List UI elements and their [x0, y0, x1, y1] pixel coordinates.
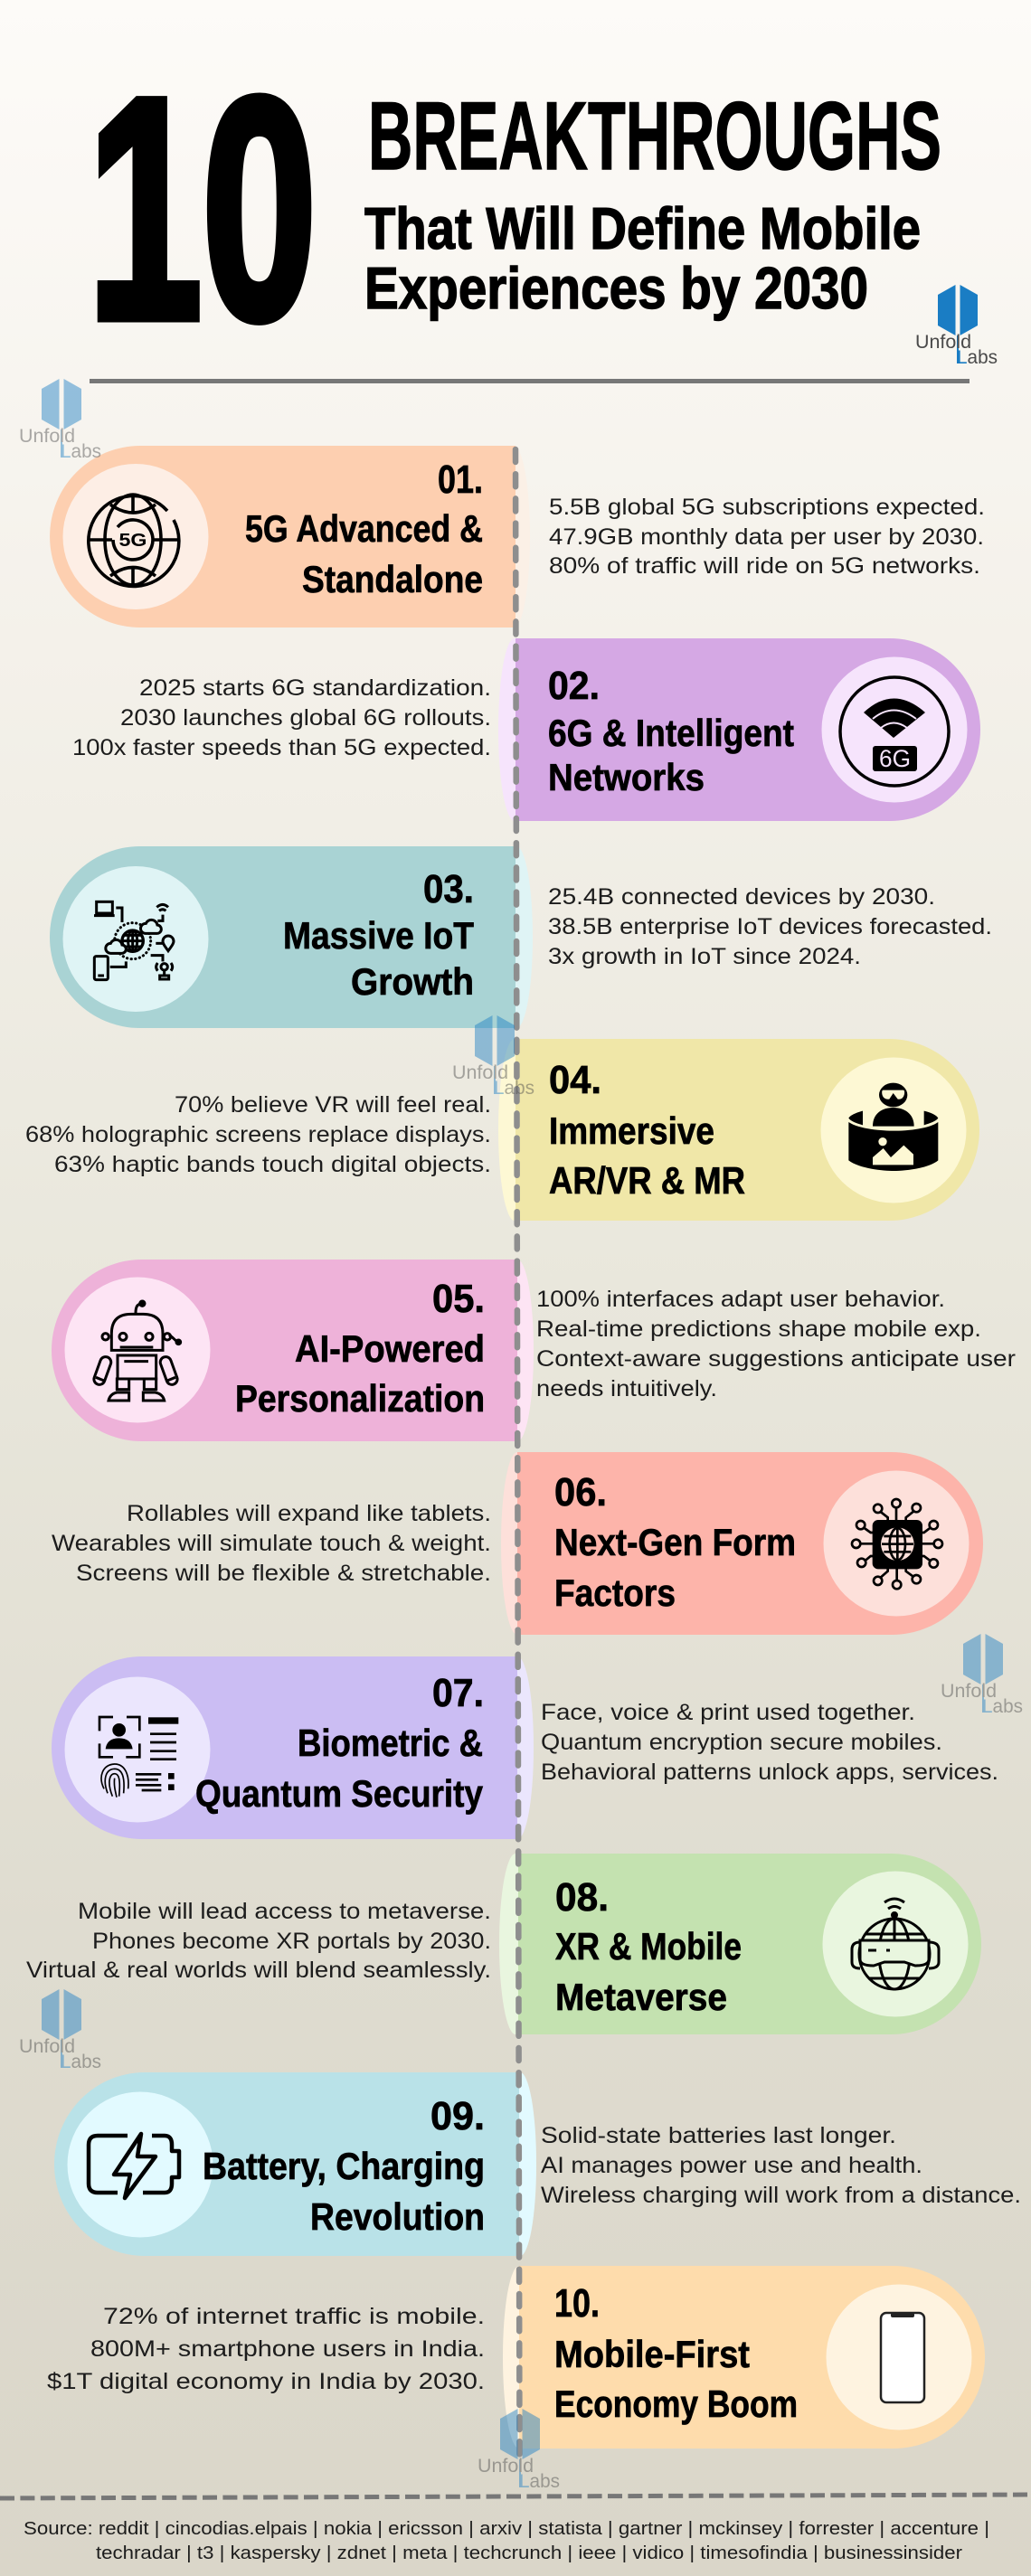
logo: Unfold Labs top right: Unfold: [915, 332, 971, 353]
logo: Unfold Labs top right: [915, 285, 998, 368]
footer dashed divider: [0, 2495, 1031, 2498]
logo: Unfold Labs watermark center: Unfold: [452, 1062, 508, 1083]
title divider: [90, 379, 970, 383]
halo: [498, 1039, 531, 1221]
logo: Unfold Labs watermark bottom: Labs: [519, 2471, 560, 2492]
logo: Unfold Labs watermark right: Labs: [982, 1696, 1023, 1717]
title line 2: Metaverse: [555, 1976, 727, 2018]
icon: IoT network: [94, 901, 174, 980]
stat: Screens will be flexible & stretchable.: [76, 1561, 491, 1586]
pill: [52, 1656, 517, 1839]
stat: Wearables will simulate touch & weight.: [52, 1531, 491, 1556]
icon circle: [63, 866, 208, 1012]
stat: 5.5B global 5G subscriptions expected.: [549, 495, 985, 520]
number: 01.: [438, 458, 483, 502]
panel 01: 5G Advanced & Standalone: [50, 446, 530, 627]
icon: 5G globe: [88, 495, 179, 586]
icon: XR globe helmet: [852, 1899, 939, 1989]
title: [88, 33, 941, 384]
panel 09: Battery, Charging Revolution: [54, 2072, 536, 2256]
icon circle: [65, 1277, 210, 1423]
logo: Unfold Labs watermark right: Unfold: [941, 1681, 997, 1702]
stat: 800M+ smartphone users in India.: [90, 2336, 485, 2362]
title: Biometric &: [298, 1722, 483, 1764]
stats 06: [52, 1501, 491, 1586]
halo: [501, 1260, 534, 1441]
pill: [518, 1854, 981, 2034]
pill: [519, 2266, 985, 2449]
icon circle: [821, 1058, 966, 1203]
stat: Wireless charging will work from a distance.: [541, 2183, 1021, 2208]
panel 02: 6G & Intelligent Networks: [498, 638, 980, 821]
stat: needs intuitively.: [536, 1376, 717, 1401]
stat: 80% of traffic will ride on 5G networks.: [549, 553, 980, 579]
stat: Phones become XR portals by 2030.: [92, 1929, 491, 1954]
title: 5G Advanced &: [245, 507, 483, 550]
stats 01: [549, 495, 985, 579]
stat: 2025 starts 6G standardization.: [139, 675, 491, 701]
logo: Unfold Labs watermark left: [19, 379, 101, 462]
icon: chip globe: [852, 1499, 942, 1589]
pill: [50, 846, 516, 1028]
stats 07: [541, 1700, 998, 1785]
stat: Virtual & real worlds will blend seamlessly.: [26, 1958, 491, 1983]
panel 03: Massive IoT Growth: [50, 846, 533, 1028]
icon: 6G signal: 6G: [879, 745, 911, 772]
title line 2: Networks: [548, 756, 705, 798]
stat: 25.4B connected devices by 2030.: [548, 884, 935, 910]
title line 2: Economy Boom: [554, 2383, 798, 2425]
title line 2: Personalization: [235, 1377, 485, 1420]
number: 03.: [423, 867, 474, 911]
stat: AI manages power use and health.: [541, 2153, 922, 2178]
panel 07: Biometric & Quantum Security: [52, 1656, 534, 1839]
stats 02: [72, 675, 491, 760]
stat: 100% interfaces adapt user behavior.: [536, 1287, 945, 1312]
stats 05: [536, 1287, 1016, 1401]
stat: Solid-state batteries last longer.: [541, 2123, 896, 2148]
panel 08: XR & Mobile Metaverse: [499, 1854, 981, 2034]
icon circle: [67, 2092, 213, 2237]
title line 2: Quantum Security: [195, 1772, 484, 1815]
number: 06.: [554, 1470, 607, 1514]
pill: [50, 446, 516, 627]
stat: Mobile will lead access to metaverse.: [78, 1899, 491, 1924]
title line 2: Standalone: [302, 558, 483, 600]
number: 04.: [549, 1058, 601, 1102]
stat: Context-aware suggestions anticipate user: [536, 1346, 1016, 1372]
number: 07.: [432, 1671, 484, 1715]
stat: 2030 launches global 6G rollouts.: [120, 705, 491, 731]
icon circle: [63, 464, 208, 609]
stats 10: [47, 2304, 485, 2394]
icon: biometric ID: [99, 1717, 178, 1798]
subtitle line 1: That Will Define Mobile: [364, 195, 921, 261]
logo: Unfold Labs watermark left: Labs: [61, 441, 101, 462]
halo: [503, 2072, 536, 2256]
sources: [24, 2519, 989, 2563]
logo: Unfold Labs watermark left: Unfold: [19, 426, 75, 447]
logo: Unfold Labs watermark lower left: Labs: [61, 2052, 101, 2072]
icon: battery charging: [89, 2134, 179, 2198]
icon circle: [821, 656, 968, 803]
pill: [517, 1452, 983, 1635]
stat: 68% holographic screens replace displays.: [25, 1122, 491, 1147]
panel 05: AI-Powered Personalization: [52, 1260, 534, 1441]
stat: Real-time predictions shape mobile exp.: [536, 1316, 981, 1342]
icon: robot: [92, 1301, 181, 1401]
halo: [499, 1854, 532, 2034]
logo: Unfold Labs watermark lower left: Unfold: [19, 2036, 75, 2057]
logo: Unfold Labs watermark lower left: [19, 1989, 101, 2072]
stat: Behavioral patterns unlock apps, services.: [541, 1760, 998, 1785]
halo: [497, 446, 530, 627]
icon: smartphone: [881, 2313, 924, 2402]
stat: $1T digital economy in India by 2030.: [47, 2369, 485, 2394]
halo: [500, 846, 533, 1028]
subtitle line 2: Experiences by 2030: [364, 255, 868, 321]
stat: 3x growth in IoT since 2024.: [548, 944, 861, 969]
source line 2: techradar | t3 | kaspersky | zdnet | meta | techcrunch | ieee | vidico | timesofindia | businessinsider: [96, 2543, 962, 2563]
stat: Quantum encryption secure mobiles.: [541, 1730, 942, 1755]
title: 6G & Intelligent: [548, 712, 794, 754]
halo: [503, 2266, 535, 2449]
title: XR & Mobile: [555, 1925, 742, 1967]
title line 2: Factors: [554, 1571, 676, 1614]
halo: [501, 1656, 534, 1839]
stat: 47.9GB monthly data per user by 2030.: [549, 524, 984, 550]
halo: [501, 1452, 534, 1635]
icon circle: [65, 1676, 210, 1823]
icon: 5G globe: 5G: [119, 531, 147, 551]
logo: Unfold Labs top right: Labs: [957, 347, 998, 368]
panel 10: Mobile-First Economy Boom: [503, 2266, 985, 2449]
number: 02.: [548, 664, 600, 708]
pill: [52, 1260, 517, 1441]
icon: immersive VR user: [848, 1083, 938, 1171]
icon circle: [827, 2284, 971, 2430]
stat: 63% haptic bands touch digital objects.: [54, 1152, 491, 1177]
icon: 6G signal: [840, 677, 949, 786]
title line 2: Growth: [351, 960, 474, 1003]
icon circle: [823, 1470, 970, 1617]
title: Next-Gen Form: [554, 1521, 796, 1563]
title: Mobile-First: [554, 2333, 750, 2375]
title: Immersive: [549, 1109, 714, 1152]
source line 1: Source: reddit | cincodias.elpais | nokia | ericsson | arxiv | statista | gartner | mckinsey | forrester | accenture |: [24, 2519, 989, 2539]
title line 2: Revolution: [310, 2195, 485, 2238]
halo: [498, 638, 531, 821]
stats 04: [25, 1092, 491, 1177]
logo: Unfold Labs watermark bottom: [478, 2409, 560, 2492]
stats 03: [548, 884, 992, 969]
pill: [54, 2072, 519, 2256]
title line 2: AR/VR & MR: [549, 1159, 745, 1202]
central dashed timeline: [516, 449, 519, 2456]
number: 08.: [555, 1875, 609, 1920]
stat: 70% believe VR will feel real.: [175, 1092, 491, 1118]
number: 05.: [432, 1277, 485, 1321]
title: Battery, Charging: [203, 2145, 485, 2187]
pill: [516, 1039, 979, 1221]
panel 06: Next-Gen Form Factors: [501, 1452, 983, 1635]
stat: 38.5B enterprise IoT devices forecasted.: [548, 914, 992, 939]
pill: [516, 638, 980, 821]
title: Massive IoT: [283, 914, 474, 957]
stat: Face, voice & print used together.: [541, 1700, 915, 1725]
number: 10.: [554, 2281, 600, 2326]
stat: 100x faster speeds than 5G expected.: [72, 735, 491, 760]
panel 04: Immersive AR/VR & MR: [498, 1039, 979, 1221]
big number 10: 10: [88, 33, 317, 384]
stat: Rollables will expand like tablets.: [127, 1501, 491, 1526]
logo: Unfold Labs watermark center: Labs: [494, 1078, 534, 1099]
stats 09: [541, 2123, 1021, 2208]
logo: Unfold Labs watermark bottom: Unfold: [478, 2456, 534, 2477]
logo: Unfold Labs watermark right: [941, 1634, 1023, 1717]
title: AI-Powered: [295, 1327, 485, 1370]
number: 09.: [430, 2094, 485, 2138]
stats 08: [26, 1899, 491, 1983]
stat: 72% of internet traffic is mobile.: [103, 2304, 485, 2329]
logo: Unfold Labs watermark center: [452, 1015, 534, 1099]
icon circle: [823, 1872, 968, 2016]
